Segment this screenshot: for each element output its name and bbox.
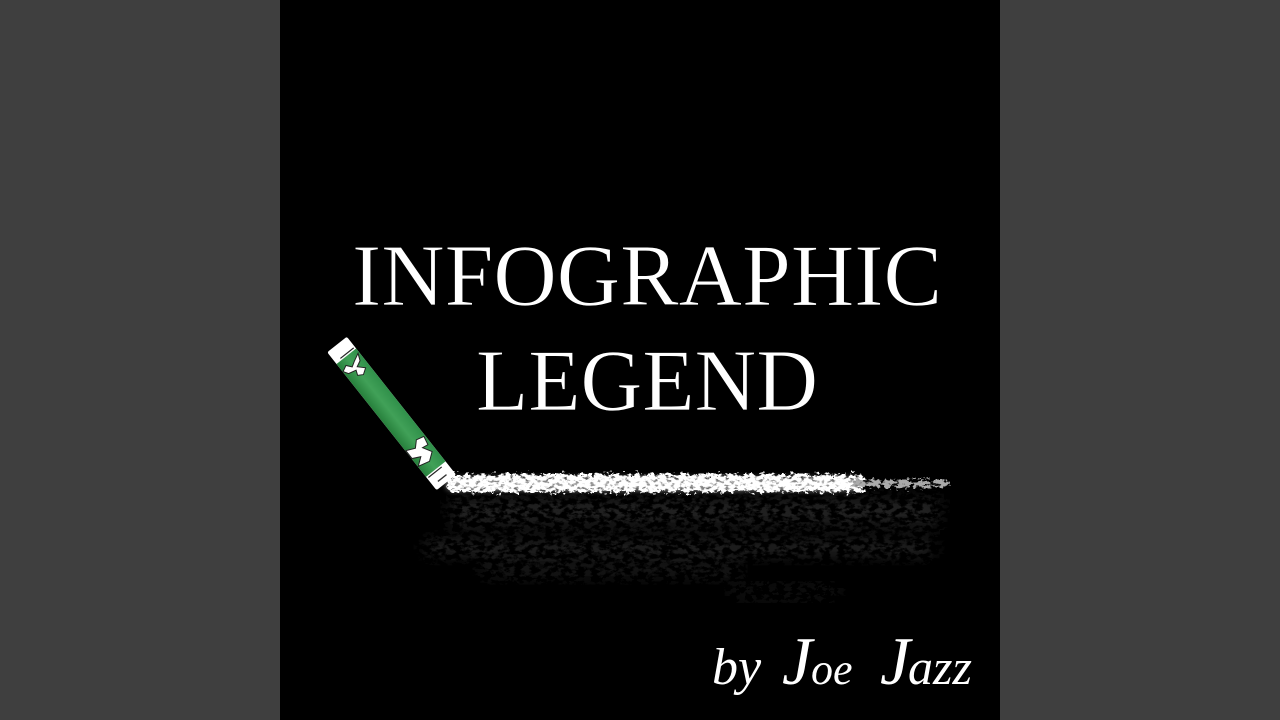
title: Infographic Legend: INFOGRAPHIC	[352, 228, 942, 325]
signature: by Joe Jazz: azz	[908, 639, 972, 695]
signature: by Joe Jazz: J	[880, 623, 913, 699]
signature: by Joe Jazz: by	[712, 639, 762, 696]
signature: by Joe Jazz: J	[782, 623, 815, 699]
icon: lower label mark	[405, 435, 438, 469]
panel: black square cover	[280, 0, 1000, 720]
chalk line	[446, 474, 950, 492]
chalk smear shadow below the line	[424, 499, 940, 598]
title: Infographic Legend: LEGEND	[476, 333, 818, 430]
title: Infographic Legend	[352, 228, 942, 430]
signature: by Joe Jazz: oe	[811, 645, 853, 694]
icon: upper label mark	[340, 353, 370, 383]
icon: green and white chalk stick	[327, 337, 456, 490]
